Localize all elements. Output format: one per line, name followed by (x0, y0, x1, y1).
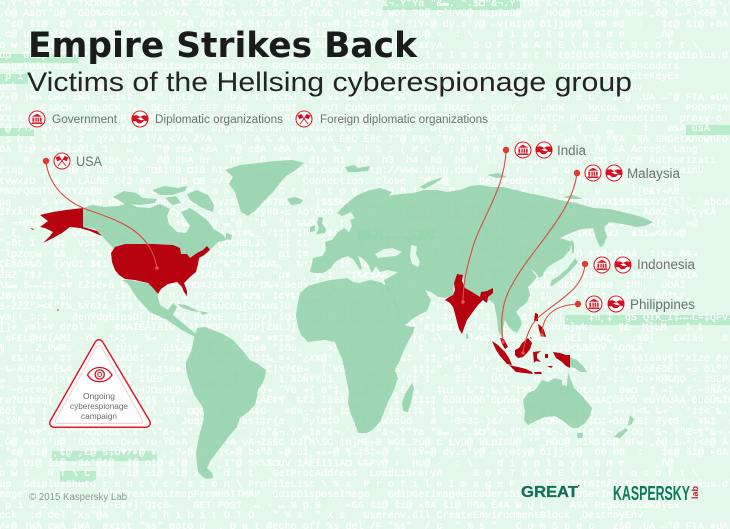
greenland (225, 160, 304, 216)
new zealand (614, 415, 634, 438)
legend (29, 111, 488, 127)
line: philippines (542, 304, 578, 335)
callout: philippines (575, 296, 695, 312)
green landmasses (83, 160, 653, 479)
line: india (463, 150, 506, 302)
cuba (177, 304, 209, 315)
callout: malaysia: Malaysia (627, 166, 680, 181)
connector lines (46, 150, 585, 353)
triangle label: campaign (81, 412, 117, 421)
callout: usa (43, 153, 102, 169)
australia (523, 372, 592, 438)
black sea and caspian cut-outs (375, 245, 420, 267)
legend: government (29, 111, 118, 127)
legend: foreign diplomatic organizations (296, 111, 488, 127)
line: usa (46, 162, 157, 268)
legend: diplomatic organizations (132, 111, 283, 127)
south america (186, 327, 266, 479)
warning triangle: ongoing cyberespionage campaign (54, 344, 146, 423)
callout: usa: USA (76, 154, 102, 169)
callout: philippines: Philippines (630, 297, 695, 312)
arctic islands (113, 186, 232, 240)
callouts (43, 142, 695, 312)
japan (550, 239, 578, 286)
line end dots (155, 266, 544, 355)
sri lanka (466, 333, 469, 339)
triangle label (70, 392, 129, 421)
madagascar (402, 383, 414, 412)
red: alaska (30, 208, 102, 243)
red: contiguous usa (111, 244, 210, 296)
world map (30, 160, 653, 479)
red: malaysia, indonesia, philippines (492, 313, 570, 374)
callout: indonesia: Indonesia (637, 257, 695, 272)
eurasia (310, 185, 653, 338)
africa (296, 278, 415, 433)
red: india (445, 274, 493, 334)
legend: government: Government (52, 114, 118, 126)
canada and mexico (83, 203, 227, 262)
icon: eye (88, 368, 112, 382)
copyright: © 2015 Kaspersky Lab (29, 492, 127, 503)
triangle label: cyberespionage (70, 402, 129, 411)
callout: indonesia (582, 257, 695, 273)
logo: great: GREAT (521, 484, 578, 501)
subtitle: Victims of the Hellsing cyberespionage group (27, 67, 632, 97)
callout: india (503, 142, 586, 158)
callout: india: India (557, 143, 586, 158)
legend: diplomatic organizations: Diplomatic organizations (155, 114, 283, 126)
logo: kaspersky lab: lab (690, 486, 700, 499)
legend: foreign diplomatic organizations: Foreign diplomatic organizations (320, 114, 488, 126)
iceland uk svalbard (287, 165, 583, 234)
callout: malaysia (574, 165, 680, 181)
triangle label: Ongoing (83, 392, 115, 401)
faint red speck (57, 309, 59, 311)
line: malaysia (502, 173, 577, 342)
line: indonesia (523, 264, 585, 353)
papua (570, 357, 587, 372)
title: Empire Strikes Back (28, 26, 418, 66)
